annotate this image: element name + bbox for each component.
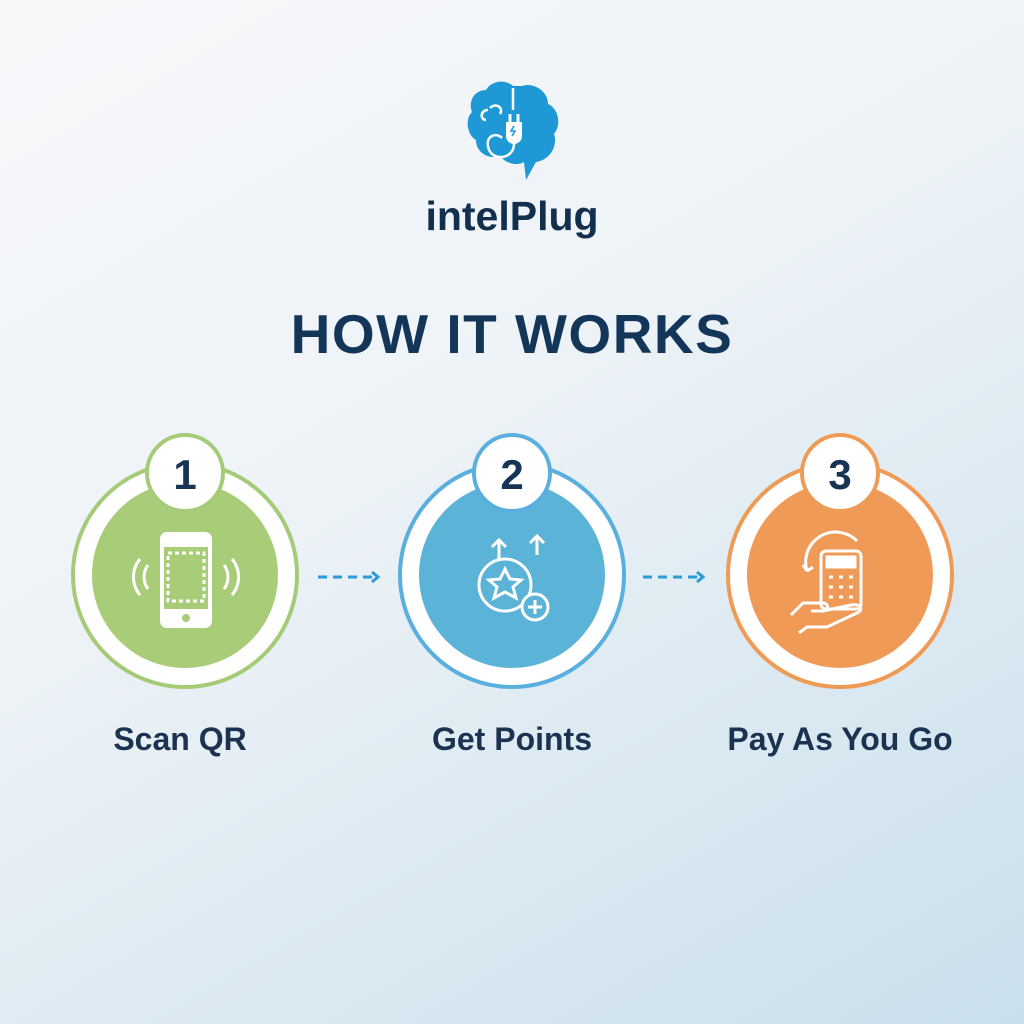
step 3 <box>726 433 954 689</box>
icon: star points <box>479 536 548 620</box>
arrow 2 <box>643 570 706 584</box>
arrow 1 <box>318 570 380 584</box>
icon: hand with card terminal <box>791 532 861 633</box>
brand name: intelPlug <box>425 193 599 239</box>
step 1: 1 <box>173 451 197 498</box>
label 1: Scan QR <box>113 721 247 757</box>
icon: phone QR <box>133 532 239 628</box>
step 3: 3 <box>828 451 852 498</box>
label 3: Pay As You Go <box>727 721 953 757</box>
step 1 <box>71 433 299 689</box>
logo: brain plug icon <box>468 82 558 180</box>
label 2: Get Points <box>432 721 592 757</box>
step 2 <box>398 433 626 689</box>
step 2: 2 <box>500 451 524 498</box>
title: HOW IT WORKS <box>291 303 733 365</box>
